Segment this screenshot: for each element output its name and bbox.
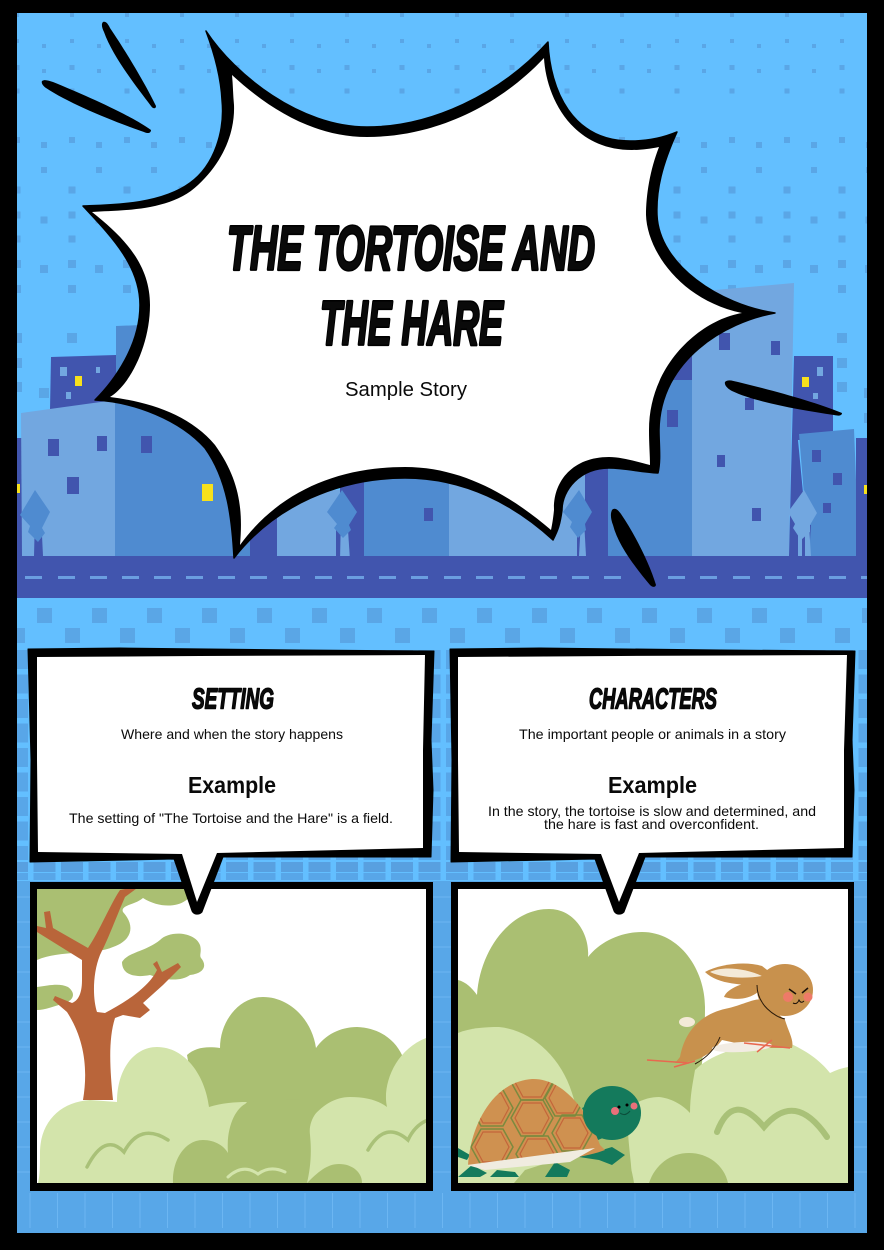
heading: setting: SETTING <box>192 683 274 715</box>
front bushes <box>38 1038 426 1183</box>
title: THE HARE <box>320 290 504 358</box>
front bushes <box>458 1027 574 1183</box>
icon: hare <box>647 964 813 1067</box>
road <box>17 556 867 598</box>
canopy foliage <box>37 889 204 1010</box>
characters definition: The important people or animals in a story <box>519 726 786 742</box>
heading: characters example: Example <box>608 772 697 798</box>
right buildings <box>585 283 867 556</box>
back bushes <box>458 909 705 1183</box>
back bushes <box>187 997 402 1114</box>
city skyline <box>17 283 867 598</box>
burst accent strokes <box>42 22 842 587</box>
title burst <box>83 31 775 558</box>
title <box>227 214 595 358</box>
grass marks <box>87 1120 428 1177</box>
characters example text: In the story, the tortoise is slow and determined, and <box>488 803 816 819</box>
tree trunk <box>37 886 181 1100</box>
subtitle: Sample Story <box>345 379 467 401</box>
panel: setting speech bubble <box>28 648 434 914</box>
panel: characters illustration <box>451 882 854 1191</box>
left buildings <box>17 325 585 556</box>
panel: characters speech bubble <box>450 648 855 914</box>
setting example text: The setting of "The Tortoise and the Hare" is a field. <box>69 810 393 826</box>
icon: tortoise <box>458 1079 641 1177</box>
heading: characters: CHARACTERS <box>589 683 717 715</box>
foreground bushes <box>173 1104 316 1183</box>
title: THE TORTOISE AND <box>227 214 595 284</box>
heading: setting example: Example <box>188 772 276 798</box>
trees <box>20 490 817 560</box>
panel: setting illustration <box>30 882 433 1191</box>
setting definition: Where and when the story happens <box>121 726 343 742</box>
characters example text <box>488 803 816 832</box>
grass marks <box>717 1110 827 1137</box>
characters example text: the hare is fast and overconfident. <box>544 816 759 832</box>
